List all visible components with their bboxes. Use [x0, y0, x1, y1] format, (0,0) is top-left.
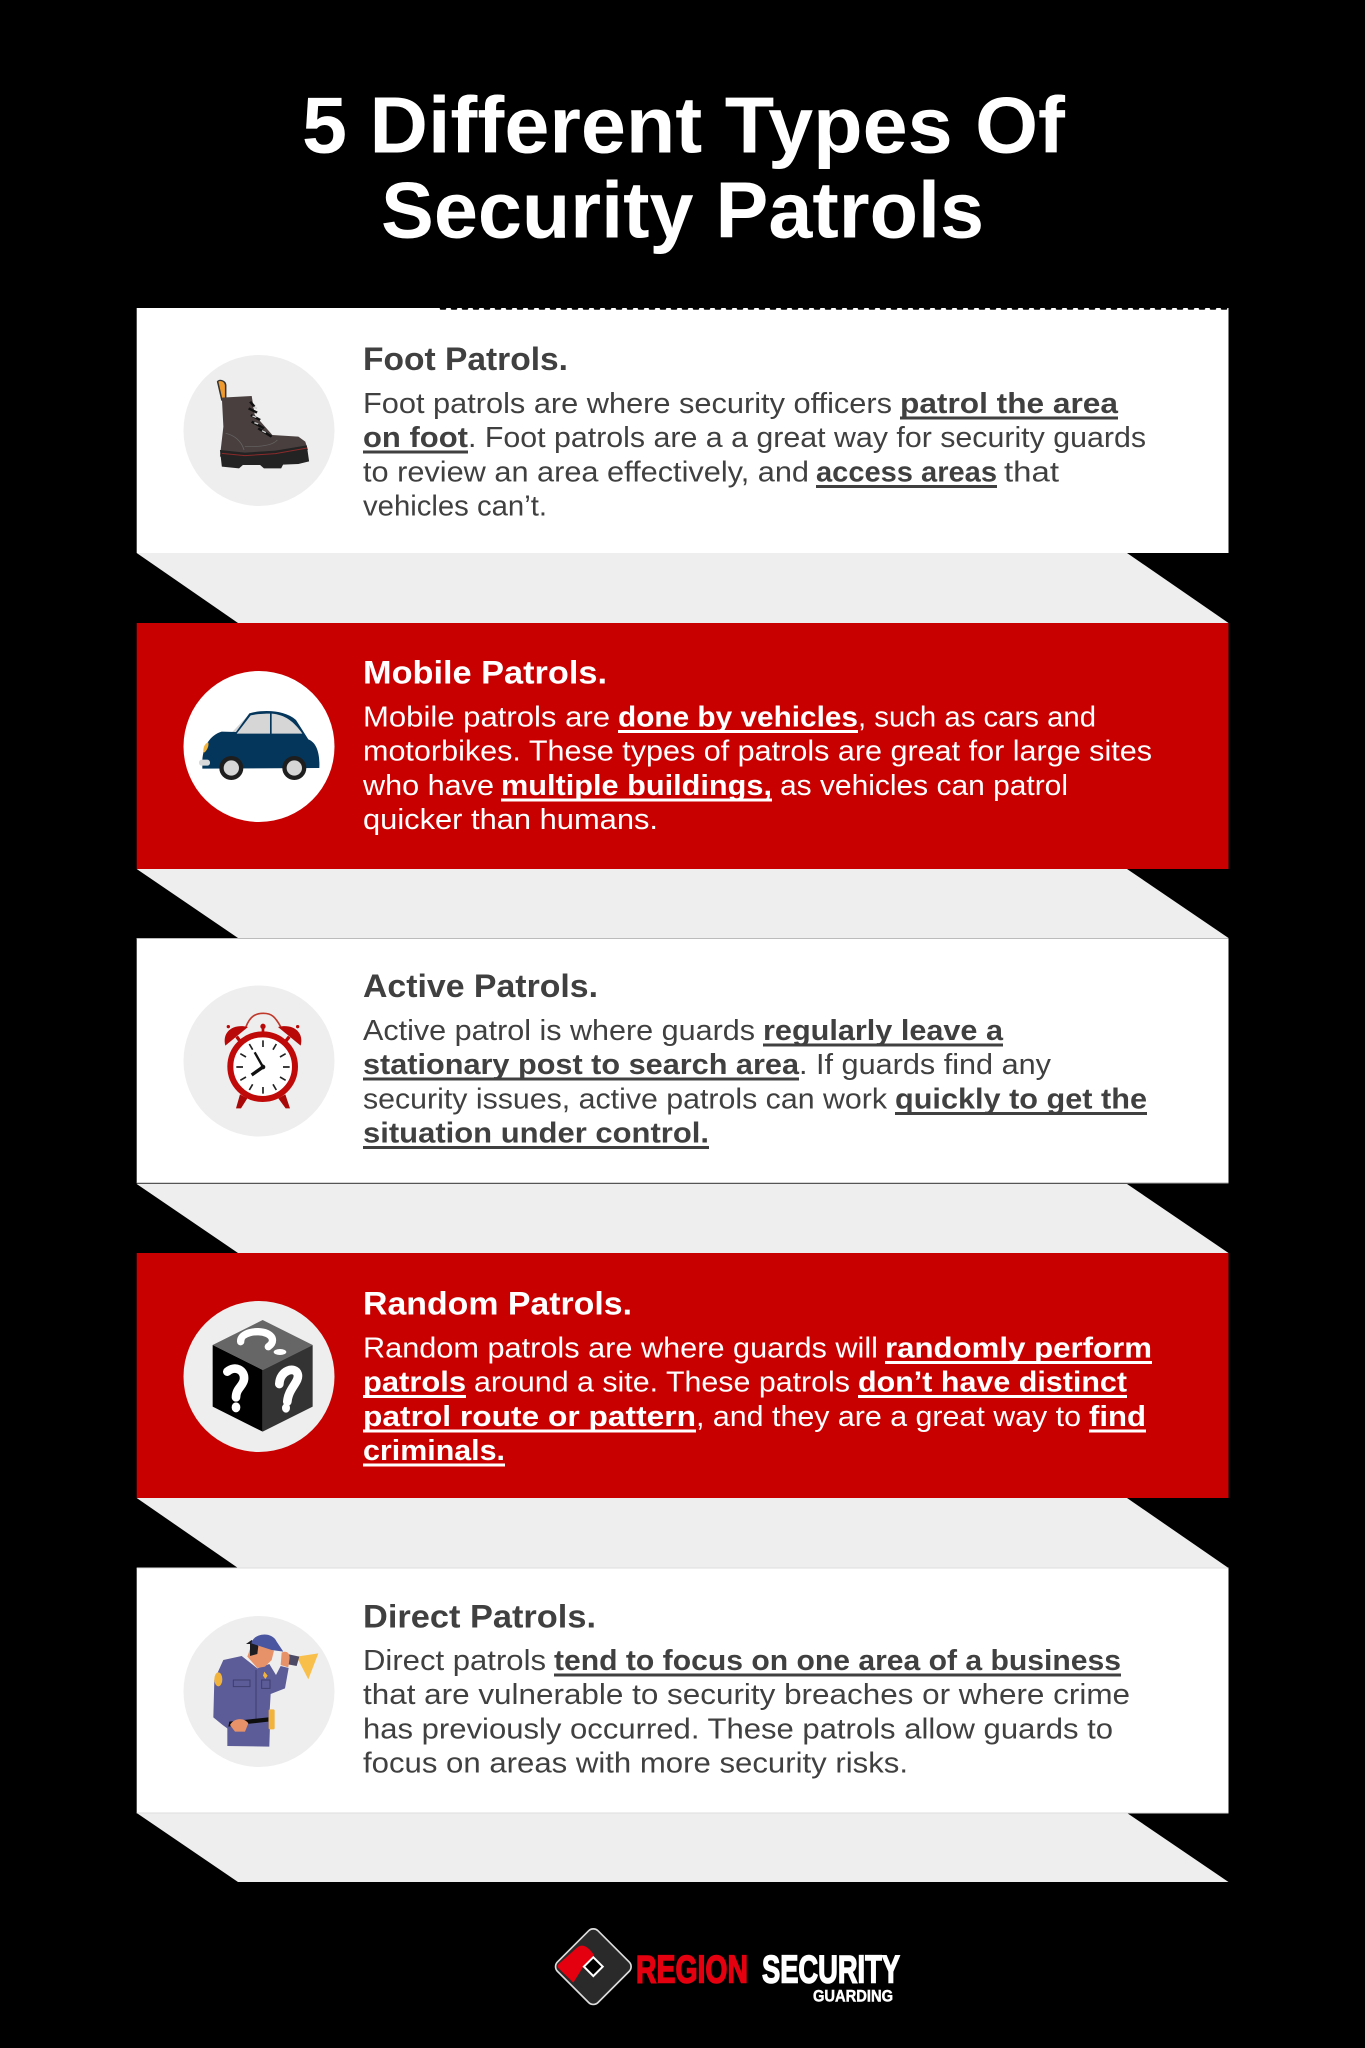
logo mark: [553, 1926, 634, 2007]
body text: Mobile patrols are: [363, 702, 610, 734]
body text: . If guards find any: [799, 1049, 1052, 1081]
panel: random patrols: [137, 1253, 1229, 1568]
body text: who have: [362, 770, 494, 802]
icon: security guard with flashlight: [213, 1635, 318, 1747]
heading: Mobile Patrols.: [363, 654, 607, 690]
body text: patrol route or pattern: [363, 1401, 696, 1433]
panel: active patrols: [137, 938, 1229, 1253]
body text: don’t have distinct: [858, 1366, 1127, 1398]
icon: mystery box: [213, 1320, 313, 1432]
body text: stationary post to search area: [363, 1049, 800, 1081]
body text: that: [1004, 456, 1059, 488]
body text: has previously occurred. These patrols allow guards to: [363, 1714, 1113, 1746]
panel: mobile patrols: [137, 623, 1229, 938]
body text: quickly to get the: [895, 1084, 1147, 1116]
body text: [363, 388, 1146, 522]
body text: patrols: [363, 1366, 466, 1398]
body text: . Foot patrols are a a great way for security guards: [468, 422, 1146, 454]
heading: Direct Patrols.: [363, 1598, 596, 1634]
body text: to review an area effectively, and: [363, 456, 809, 488]
body text: [363, 1332, 1152, 1467]
body text: , such as cars and: [858, 702, 1096, 734]
body text: motorbikes. These types of patrols are great for large sites: [363, 736, 1152, 768]
body text: Direct patrols: [363, 1645, 546, 1677]
body text: Active patrol is where guards: [363, 1015, 755, 1047]
body text: security issues, active patrols can work: [363, 1084, 888, 1116]
body text: tend to focus on one area of a business: [554, 1645, 1121, 1677]
body text: [363, 1645, 1130, 1780]
body text: as vehicles can patrol: [780, 770, 1068, 802]
heading: Foot Patrols.: [363, 341, 568, 377]
body text: find: [1089, 1401, 1146, 1433]
title: Security Patrols: [381, 166, 984, 254]
body text: randomly perform: [885, 1332, 1152, 1364]
body text: access areas: [816, 456, 997, 488]
logo wordmark: SECURITY: [762, 1948, 900, 1992]
body text: patrol the area: [900, 388, 1119, 420]
title: [302, 80, 1065, 254]
body text: focus on areas with more security risks.: [363, 1748, 908, 1780]
body text: [362, 702, 1152, 836]
body text: [363, 1015, 1147, 1150]
panel: direct patrols: [137, 1568, 1229, 1882]
body text: vehicles can’t.: [363, 490, 547, 522]
body text: regularly leave a: [763, 1015, 1004, 1047]
body text: , and they are a great way to: [696, 1401, 1081, 1433]
icon: boot: [218, 380, 309, 468]
body text: around a site. These patrols: [474, 1366, 850, 1398]
body text: quicker than humans.: [363, 804, 658, 836]
heading: Active Patrols.: [363, 968, 598, 1004]
body text: that are vulnerable to security breaches or where crime: [363, 1679, 1130, 1711]
logo wordmark: [636, 1948, 900, 2006]
body text: done by vehicles: [618, 702, 858, 734]
body text: situation under control.: [363, 1118, 709, 1150]
logo: Region Security Guarding: [553, 1926, 900, 2007]
body text: Random patrols are where guards will: [363, 1332, 878, 1364]
title: 5 Different Types Of: [302, 80, 1065, 170]
icon: car: [199, 711, 319, 780]
body text: criminals.: [363, 1435, 505, 1467]
panel: foot patrols: [137, 308, 1229, 623]
logo wordmark: GUARDING: [813, 1986, 893, 2006]
body text: multiple buildings,: [501, 770, 772, 802]
body text: Foot patrols are where security officers: [363, 388, 892, 420]
icon: alarm clock: [225, 1013, 301, 1108]
heading: Random Patrols.: [363, 1286, 632, 1322]
body text: on foot: [363, 422, 468, 454]
logo wordmark: REGION: [636, 1948, 748, 1992]
